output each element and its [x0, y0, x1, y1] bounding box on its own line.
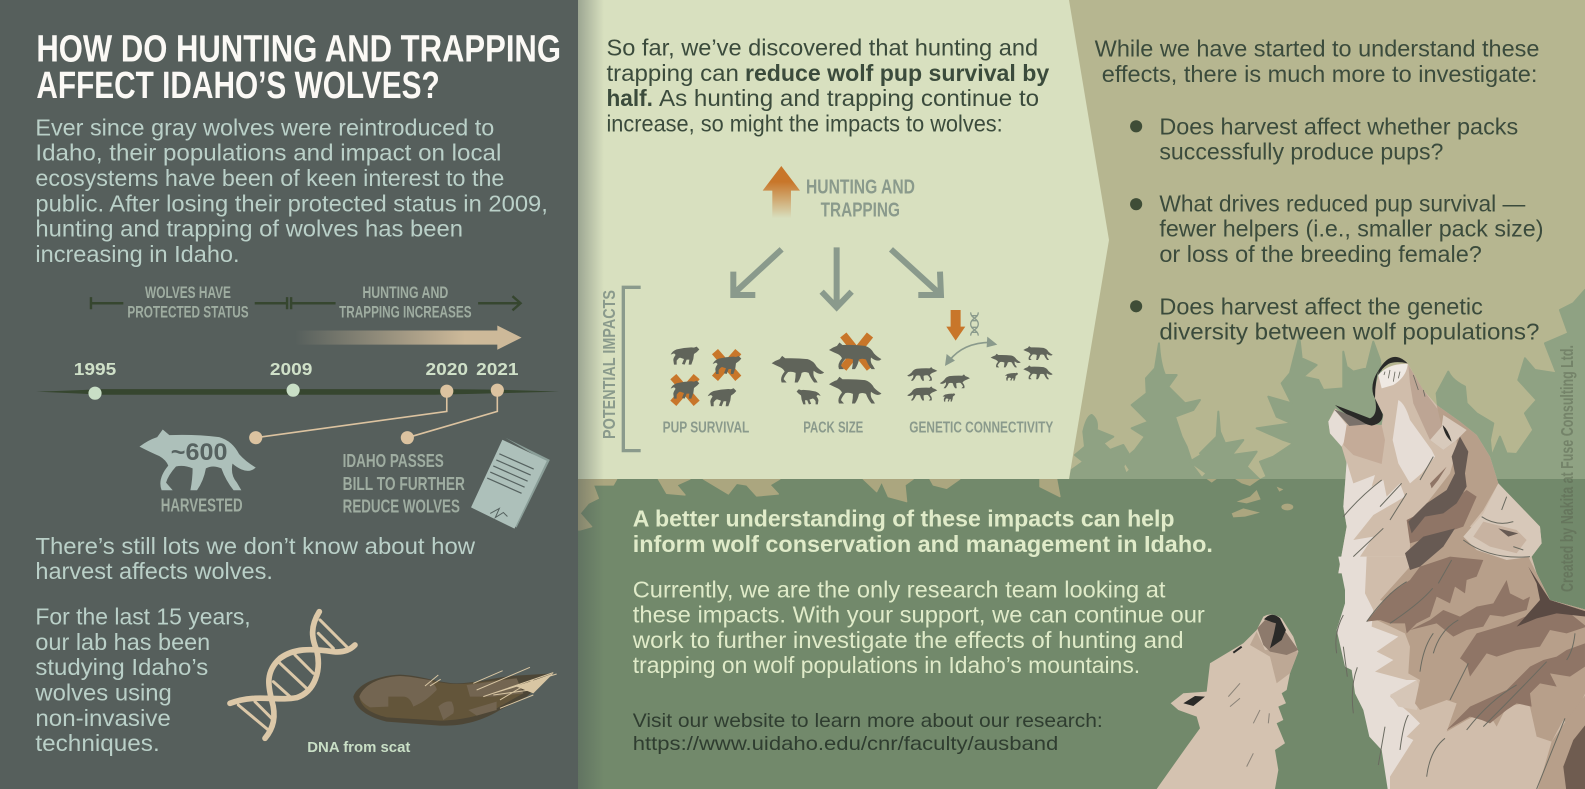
- text: still lots unknown: [35, 533, 476, 584]
- text: lab study: our lab has been: [35, 629, 210, 655]
- intro to open questions: effects, there is much more to investigate:: [1102, 61, 1537, 87]
- bullet list of questions: Does harvest affect whether packs: [1159, 113, 1518, 139]
- text: lab study: techniques.: [35, 730, 160, 756]
- support paragraph: [632, 576, 1205, 678]
- timeline with years: 2020: [426, 359, 468, 379]
- panel: ground with tree reflections: [570, 479, 1585, 789]
- bullet list of questions: What drives reduced pup survival —: [1159, 190, 1526, 216]
- findings paragraph: reduce wolf pup survival by: [745, 60, 1050, 86]
- impact: pack size: PACK SIZE: [803, 420, 864, 437]
- panel: right background with khaki sky: [570, 0, 1585, 480]
- impact: genetic connectivity: [907, 310, 1054, 437]
- icon: wolf scat with hair: [353, 667, 557, 726]
- panel: light green findings panel: [573, 0, 1109, 479]
- timeline with years: [36, 359, 559, 400]
- intro paragraph: public. After losing their protected status in 2009,: [35, 190, 548, 216]
- intro paragraph: Ever since gray wolves were reintroduced to: [35, 114, 494, 140]
- bracket: potential impacts: [599, 287, 641, 451]
- icon: harvested wolf with ~600: ~600: [171, 439, 227, 466]
- callout: Idaho bill: BILL TO FURTHER: [343, 474, 465, 494]
- illustration: small howling wolf pup: [1157, 614, 1298, 789]
- arrows to impacts: [733, 247, 941, 307]
- diagram: impacts of hunting and trapping: [599, 166, 1054, 451]
- icon: DNA helix: [230, 612, 355, 738]
- intro paragraph: increasing in Idaho.: [35, 241, 240, 267]
- credit line: Created by Nakita at Fuse Consulting Ltd.: [1557, 345, 1577, 592]
- intro paragraph: Idaho, their populations and impact on local: [35, 140, 501, 166]
- text: lab study: studying Idaho’s: [35, 654, 208, 680]
- bold conclusion: inform wolf conservation and management in Idaho.: [633, 531, 1213, 557]
- support paragraph: work to further investigate the effects of hunting and: [632, 627, 1184, 653]
- callout: Idaho bill: IDAHO PASSES: [343, 451, 444, 471]
- text: lab study: non-invasive: [35, 705, 171, 731]
- bracket: potential impacts: POTENTIAL IMPACTS: [599, 290, 619, 439]
- bullet list of questions: Does harvest affect the genetic: [1159, 293, 1483, 319]
- findings paragraph: As hunting and trapping continue to: [659, 85, 1039, 111]
- findings paragraph: trapping can: [606, 60, 739, 86]
- findings paragraph: So far, we’ve discovered that hunting and: [606, 35, 1038, 61]
- impact: pup survival: PUP SURVIVAL: [663, 420, 749, 437]
- diagram heading: HUNTING AND: [806, 176, 915, 198]
- support paragraph: Currently, we are the only research team looking at: [633, 576, 1166, 602]
- callout: Idaho bill: REDUCE WOLVES: [343, 496, 460, 516]
- timeline period labels: TRAPPING INCREASES: [339, 303, 472, 321]
- title: [36, 28, 561, 107]
- impact: genetic connectivity: GENETIC CONNECTIVITY: [909, 420, 1054, 437]
- connector lines to callouts: [249, 394, 497, 444]
- intro to open questions: While we have started to understand these: [1095, 36, 1539, 62]
- intro to open questions: [1095, 36, 1539, 87]
- timeline with years: 2009: [270, 359, 312, 379]
- bullet list of questions: fewer helpers (i.e., smaller pack size): [1159, 216, 1543, 242]
- timeline with years: 1995: [74, 359, 117, 379]
- caption: DNA from scat: DNA from scat: [307, 739, 410, 756]
- timeline period labels: [91, 284, 521, 321]
- findings paragraph: increase, so might the impacts to wolves:: [606, 110, 1003, 136]
- icon: signed document: [471, 438, 550, 529]
- website link: [633, 710, 1103, 755]
- bullet list of questions: or loss of the breeding female?: [1159, 241, 1482, 267]
- diagram heading: [806, 176, 915, 222]
- intro paragraph: [35, 114, 548, 267]
- title: HOW DO HUNTING AND TRAPPING: [36, 28, 561, 71]
- findings paragraph: half.: [606, 85, 653, 111]
- text: lab study: For the last 15 years,: [35, 604, 251, 630]
- forest tree silhouettes: [1070, 290, 1585, 480]
- impact: pup survival: [663, 347, 749, 437]
- website link: https://www.uidaho.edu/cnr/faculty/ausband: [633, 733, 1058, 755]
- gradient increase arrow: [295, 325, 522, 350]
- bold conclusion: [633, 506, 1213, 557]
- intro paragraph: ecosystems have been of keen interest to the: [35, 165, 504, 191]
- text: lab study: wolves using: [34, 679, 172, 705]
- bullet list of questions: diversity between wolf populations?: [1159, 319, 1539, 345]
- website link: Visit our website to learn more about our research:: [633, 710, 1103, 732]
- intro paragraph: hunting and trapping of wolves has been: [35, 216, 463, 242]
- illustration: large howling wolf: [1328, 357, 1585, 789]
- findings paragraph: [606, 35, 1050, 136]
- callout: Idaho bill: [343, 451, 465, 516]
- impact: pack size: [772, 335, 881, 437]
- timeline period labels: HUNTING AND: [362, 284, 448, 302]
- timeline with years: 2021: [476, 359, 519, 379]
- bold conclusion: A better understanding of these impacts can help: [633, 506, 1175, 532]
- bullet list of questions: successfully produce pups?: [1159, 139, 1443, 165]
- icon: harvested wolf with ~600: [139, 429, 256, 515]
- text: still lots unknown: harvest affects wolves.: [35, 558, 273, 584]
- support paragraph: these impacts. With your support, we can continue our: [633, 602, 1205, 628]
- bullet list of questions: [1130, 113, 1543, 345]
- timeline period labels: WOLVES HAVE: [145, 284, 231, 302]
- panel: left dark intro column: [0, 0, 578, 789]
- title: AFFECT IDAHO’S WOLVES?: [36, 64, 440, 107]
- icon: orange up arrow: [763, 166, 800, 218]
- text: still lots unknown: There’s still lots we don’t know about how: [35, 533, 476, 559]
- diagram heading: TRAPPING: [821, 200, 900, 222]
- text: lab study: [34, 604, 251, 756]
- timeline period labels: PROTECTED STATUS: [127, 303, 249, 321]
- icon: harvested wolf with ~600: HARVESTED: [161, 495, 243, 515]
- support paragraph: trapping on wolf populations in Idaho’s mountains.: [633, 652, 1140, 678]
